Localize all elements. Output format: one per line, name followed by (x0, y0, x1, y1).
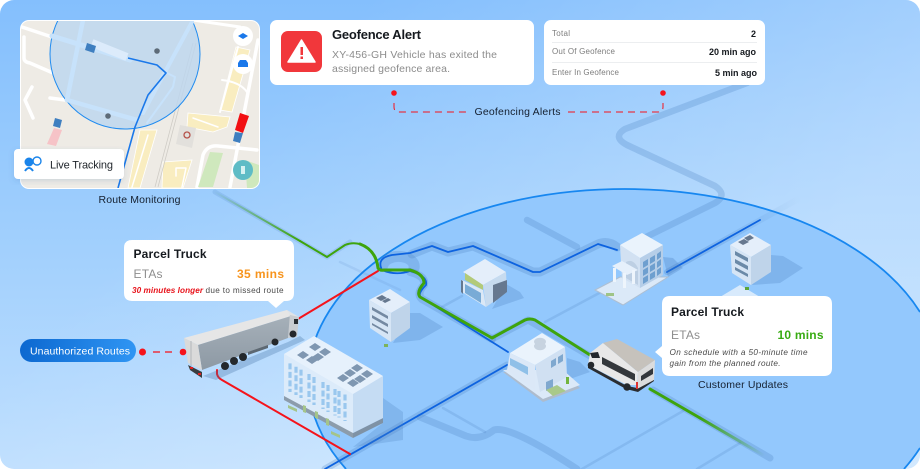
map button: layers (233, 26, 253, 46)
red truck (233, 113, 249, 143)
row: out of geofence (552, 47, 756, 57)
building: solar warehouse (284, 336, 403, 447)
callout: late truck ETA: ETAs (134, 267, 162, 281)
delay note: due to missed route (206, 286, 284, 295)
building: small office right (720, 233, 803, 297)
trailer (184, 310, 291, 345)
callout: on-time van ETA: Parcel Truck (671, 305, 744, 319)
live route (118, 58, 166, 188)
live tracking text: Live Tracking (50, 160, 113, 172)
callout: on-time van ETA: ETAs (671, 328, 700, 342)
map rail lines (154, 106, 180, 187)
callout: on-time van ETA: 10 mins (778, 328, 824, 342)
route: red unauthorized route (217, 271, 378, 454)
icon: warning (281, 31, 322, 72)
connector: geofencing alerts (391, 90, 666, 118)
row: total: 2 (751, 29, 756, 39)
callout: on-time van ETA: gain from the planned route. (670, 359, 780, 368)
building: columned office (595, 233, 683, 305)
pale street overlay (52, 20, 192, 123)
callout: on-time van ETA (655, 296, 832, 376)
geofence circle (50, 21, 200, 130)
route: blue planned route (325, 220, 760, 469)
map pins (105, 48, 160, 119)
solar panels (297, 343, 373, 387)
pink truck (47, 118, 62, 146)
map marker badge (233, 160, 253, 180)
map museum block (176, 125, 196, 148)
row: enter in geofence: 5 min ago (715, 68, 757, 78)
row: enter in geofence (552, 68, 757, 78)
building: green-roof shop (461, 259, 524, 309)
row: out of geofence: Out Of Geofence (552, 47, 616, 56)
badge: unauthorized routes: Unauthorized Routes (30, 346, 130, 358)
alert body: assigned geofence area. (332, 63, 450, 75)
row: out of geofence: 20 min ago (709, 47, 756, 57)
badge: unauthorized routes (20, 339, 136, 362)
vehicles by entrance (288, 405, 340, 438)
row: enter in geofence: Enter In Geofence (552, 68, 620, 77)
alert body (332, 49, 497, 75)
row: total (552, 29, 756, 39)
blue car (85, 43, 96, 53)
route: green on-time route (215, 192, 765, 456)
van (588, 339, 655, 392)
building: house (503, 333, 590, 402)
row: total: Total (552, 29, 570, 38)
connector: unauthorized routes (139, 348, 186, 356)
panel: geofence stats (544, 20, 765, 85)
road network (215, 83, 800, 469)
delay note: 30 minutes longer (132, 286, 204, 295)
alert body: XY-456-GH Vehicle has exited the (332, 49, 497, 61)
callout: late truck ETA (124, 240, 294, 308)
caption: geofencing alerts: Geofencing Alerts (474, 106, 560, 118)
windows (290, 363, 345, 421)
map yellow blocks (128, 47, 250, 188)
live tracking chip (14, 149, 124, 179)
caption: route monitoring: Route Monitoring (98, 194, 181, 206)
building: small office left (369, 289, 443, 347)
callout: late truck ETA: Parcel Truck (134, 247, 207, 261)
cab (288, 313, 299, 338)
icon: person with clock (24, 157, 41, 171)
geofence zone (308, 189, 920, 469)
map parks (198, 152, 223, 187)
alert heading: Geofence Alert (332, 27, 422, 42)
callout: on-time van ETA: On schedule with a 50-minute time (670, 348, 808, 357)
callout: late truck ETA: 35 mins (237, 267, 284, 281)
panel: geofence alert (270, 20, 534, 85)
caption: customer updates: Customer Updates (698, 379, 788, 391)
map streets (22, 20, 258, 187)
map button: car (233, 54, 253, 74)
panel: route monitoring map (20, 20, 260, 189)
truck (184, 310, 305, 380)
delay note (132, 286, 284, 295)
wheels (221, 330, 296, 370)
